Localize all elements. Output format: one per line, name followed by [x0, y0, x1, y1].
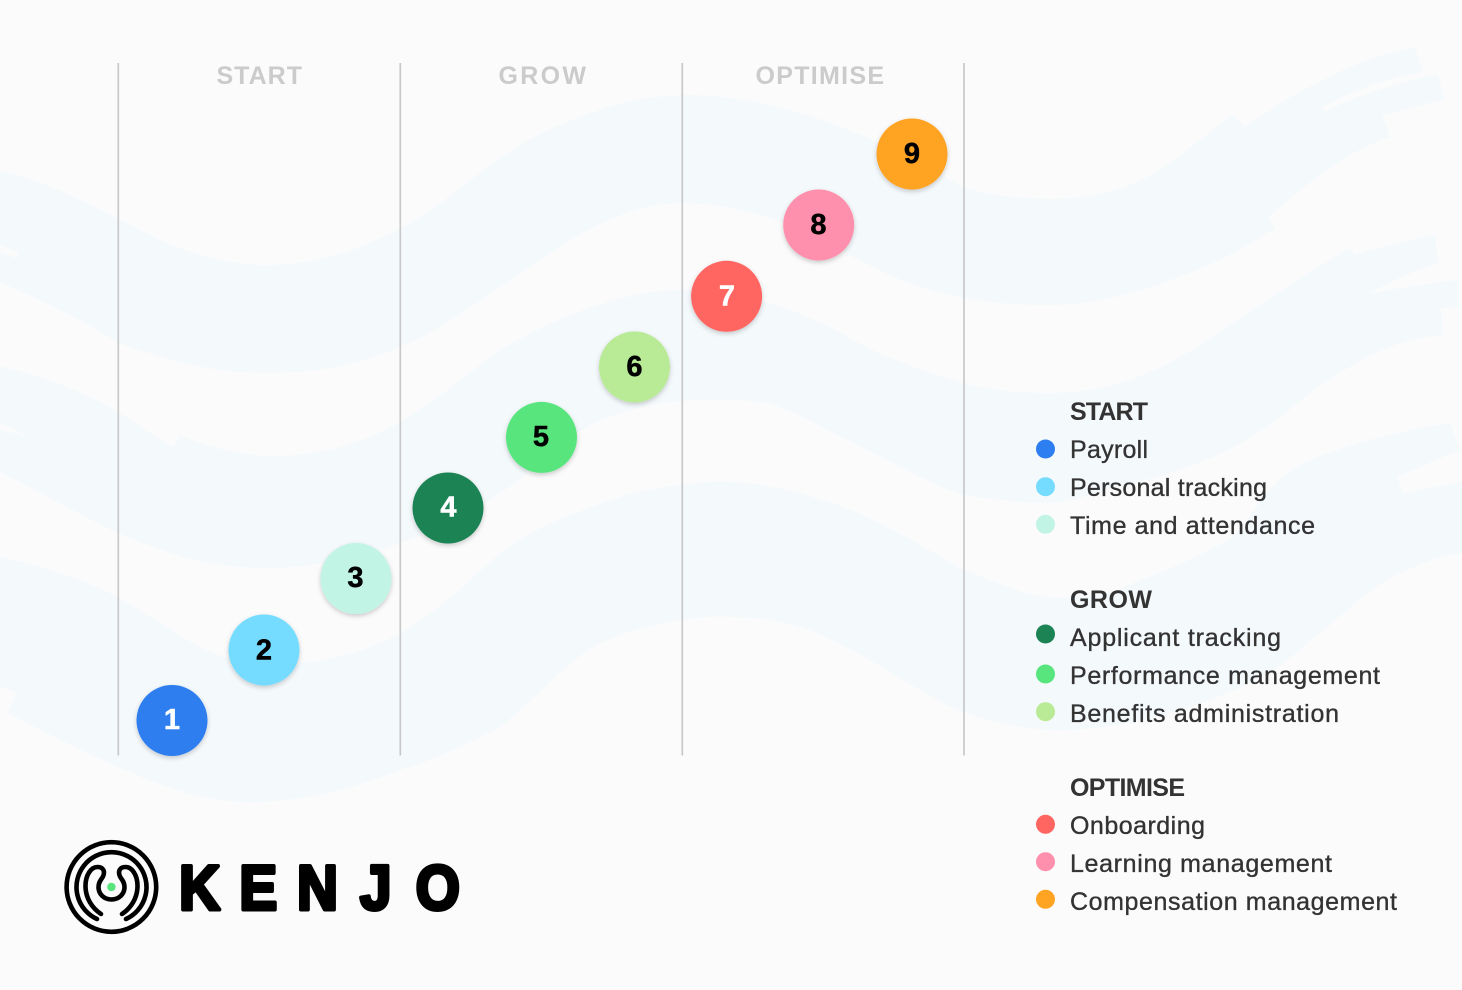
legend: grow group: Applicant tracking: [1070, 624, 1281, 652]
step 8 marker: 8: [810, 209, 827, 241]
column heading: START: START: [216, 62, 302, 90]
step 7 marker: 7: [719, 280, 735, 312]
step 8 marker: [783, 190, 854, 260]
logo: Kenjo: [67, 842, 460, 932]
step 7 marker: [691, 261, 762, 332]
step 9 marker: [876, 118, 948, 190]
step 1 marker: 1: [164, 704, 180, 736]
legend: grow group: Performance management: [1070, 662, 1380, 690]
step 1 marker: [136, 685, 208, 756]
step 2 marker: [228, 614, 300, 686]
legend: optimise group: [1036, 774, 1397, 916]
step 3 marker: 3: [347, 562, 364, 594]
step 4 marker: 4: [440, 492, 457, 524]
legend: optimise group: OPTIMISE: [1070, 774, 1185, 802]
step 6 marker: [599, 332, 670, 402]
step 2 marker: 2: [256, 634, 272, 666]
wordmark: KENJO: [179, 853, 460, 923]
legend: optimise group: Onboarding: [1070, 812, 1205, 840]
legend: start group: START: [1070, 398, 1148, 426]
legend: start group: [1036, 398, 1315, 540]
legend: grow group: GROW: [1070, 586, 1152, 614]
step 5 marker: [506, 402, 577, 473]
step 5 marker: 5: [533, 421, 549, 453]
step 4 marker: [412, 472, 484, 544]
column heading: OPTIMISE: OPTIMISE: [756, 62, 884, 90]
legend: optimise group: Compensation management: [1070, 888, 1397, 916]
legend: optimise group: Learning management: [1070, 850, 1332, 878]
column heading: GROW: GROW: [498, 62, 586, 90]
icon: labyrinth mark: [67, 842, 156, 932]
legend: start group: Personal tracking: [1070, 474, 1267, 502]
legend: grow group: [1036, 586, 1380, 728]
legend: grow group: Benefits administration: [1070, 700, 1339, 728]
step 3 marker: [320, 543, 392, 614]
legend: start group: Time and attendance: [1070, 512, 1315, 540]
legend: start group: Payroll: [1070, 436, 1148, 464]
step 6 marker: 6: [626, 351, 643, 383]
step 9 marker: 9: [904, 138, 920, 170]
